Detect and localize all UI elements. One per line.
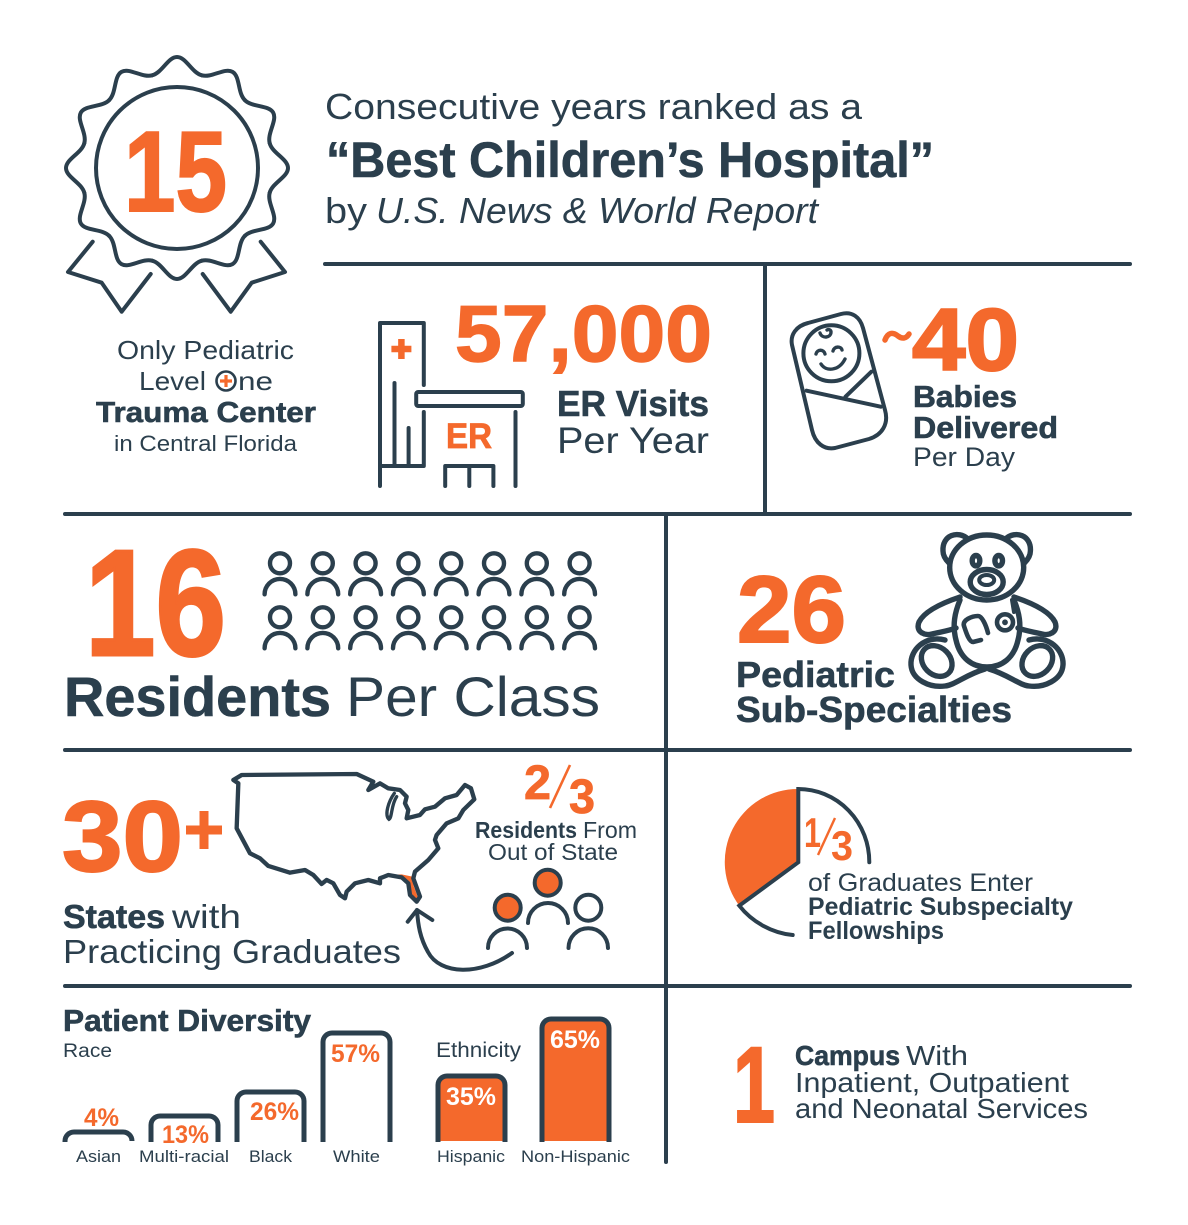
bar: Multi-racial 13%: Multi-racial: [139, 1147, 229, 1166]
stat: 57,000 ER visits: 57,000: [455, 289, 712, 378]
bar: White 57%: 57%: [331, 1040, 380, 1068]
stat: 1 campus: With: [906, 1040, 968, 1071]
stat: two thirds residents from out of state: Residents: [475, 817, 577, 843]
stat: 57,000 ER visits: [455, 289, 712, 461]
icon: award ribbon badge with 15: 15: [124, 109, 227, 236]
bar: Non-Hispanic 65%: 65%: [550, 1026, 600, 1054]
stat: about 40 babies delivered: Delivered: [913, 410, 1058, 445]
stat: 30+ states: 30: [62, 781, 183, 893]
stat: 26 pediatric sub-specialties: Pediatric: [736, 654, 895, 695]
stat: 1 campus: Campus: [795, 1040, 900, 1071]
stat: 26 pediatric sub-specialties: [736, 557, 1012, 730]
text block: level one trauma center: Trauma Center: [96, 397, 316, 429]
heading: patient diversity: Patient Diversity: [63, 1003, 312, 1038]
text block: level one trauma center: in Central Florida: [114, 431, 298, 456]
map: continental United States with Florida highlighted: [233, 774, 474, 902]
stat: 57,000 ER visits: Per Year: [557, 420, 709, 461]
text block: graduates fellowships: of Graduates Enter: [808, 869, 1033, 897]
heading: patient diversity: Race: [63, 1041, 112, 1062]
heading: patient diversity: Ethnicity: [436, 1039, 522, 1062]
icon: teddy bear with stethoscope: [911, 535, 1063, 686]
stat: 30+ states: States: [63, 898, 165, 935]
bar: White 57%: [323, 1033, 390, 1166]
heading: best children's hospital: by: [325, 190, 367, 231]
stat: two thirds residents from out of state: [475, 757, 637, 865]
bar: Hispanic 35%: Hispanic: [437, 1147, 506, 1166]
heading: best children's hospital: U.S. News & World Report: [376, 190, 820, 231]
bar: Black 26%: 26%: [250, 1098, 299, 1126]
heading: best children's hospital: Consecutive years ranked as a: [325, 86, 863, 127]
stat: 57,000 ER visits: ER Visits: [557, 383, 709, 424]
grid divider lines: [65, 264, 1130, 1162]
bar: Black 26%: [237, 1092, 304, 1166]
bar: Asian 4%: 4%: [84, 1104, 119, 1132]
chart: one third pie: 3: [831, 822, 853, 869]
icon: ER building: ER: [446, 417, 492, 456]
heading: best children's hospital: [325, 86, 934, 231]
bar: Non-Hispanic 65%: [521, 1019, 631, 1166]
text block: level one trauma center: ne: [238, 366, 273, 396]
bar: Asian 4%: [65, 1104, 132, 1166]
bar: Multi-racial 13%: [139, 1116, 229, 1166]
stat: about 40 babies delivered: Per Day: [913, 442, 1016, 472]
stat: 16 residents per class: [64, 518, 600, 728]
text block: level one trauma center: Only Pediatric: [117, 335, 294, 365]
text block: graduates fellowships: Fellowships: [808, 917, 944, 945]
heading: patient diversity: [63, 1003, 522, 1062]
text block: graduates fellowships: [808, 869, 1073, 945]
bar: Black 26%: Black: [249, 1147, 293, 1166]
stat: 1 campus: and Neonatal Services: [795, 1093, 1088, 1124]
chart: one third pie: [725, 789, 869, 935]
stat: 1 campus: [733, 1024, 1088, 1145]
stat: 1 campus: 1: [733, 1024, 775, 1145]
stat: two thirds residents from out of state: 3: [569, 771, 595, 824]
bar: White 57%: White: [333, 1147, 380, 1166]
stat: 1 campus: Inpatient, Outpatient: [795, 1067, 1069, 1098]
bar: Non-Hispanic 65%: Non-Hispanic: [521, 1147, 631, 1166]
arrow: residents to Florida: [408, 910, 512, 970]
stat: about 40 babies delivered: [885, 290, 1058, 472]
stat: 30+ states: [62, 781, 401, 970]
stat: 30+ states: Practicing Graduates: [63, 933, 401, 970]
stat: 16 residents per class: Per Class: [346, 665, 600, 728]
stat: about 40 babies delivered: Babies: [913, 379, 1017, 414]
icon: ER building: [380, 323, 523, 486]
text block: level one trauma center: Level: [139, 366, 206, 396]
stat: 30+ states: with: [171, 898, 241, 935]
bar: Hispanic 35%: 35%: [446, 1083, 496, 1111]
bar chart: race: [65, 1033, 390, 1166]
stat: 26 pediatric sub-specialties: 26: [737, 557, 846, 663]
stat: two thirds residents from out of state: Out of State: [488, 839, 618, 865]
chart: one third pie: 1: [804, 809, 821, 856]
icon: three residents, two highlighted: [488, 870, 608, 948]
icon: swaddled baby: [792, 313, 886, 448]
icon: award ribbon badge with 15: [66, 57, 288, 312]
stat: about 40 babies delivered: 40: [912, 290, 1019, 389]
text block: level one trauma center: [96, 335, 316, 456]
stat: two thirds residents from out of state: From: [583, 817, 637, 843]
text block: graduates fellowships: Pediatric Subspecialty: [808, 893, 1073, 921]
bar: Asian 4%: Asian: [76, 1147, 121, 1166]
heading: best children's hospital: “Best Children’s Hospital”: [326, 132, 934, 188]
bar: Hispanic 35%: [437, 1076, 506, 1166]
bar chart: ethnicity: [437, 1019, 631, 1166]
icon: resident people grid: [265, 553, 595, 648]
stat: two thirds residents from out of state: 2: [524, 757, 551, 810]
stat: 26 pediatric sub-specialties: Sub-Specialties: [736, 689, 1012, 730]
bar: Multi-racial 13%: 13%: [162, 1121, 209, 1149]
stat: 16 residents per class: 16: [85, 518, 226, 687]
stat: 16 residents per class: Residents: [64, 665, 331, 728]
